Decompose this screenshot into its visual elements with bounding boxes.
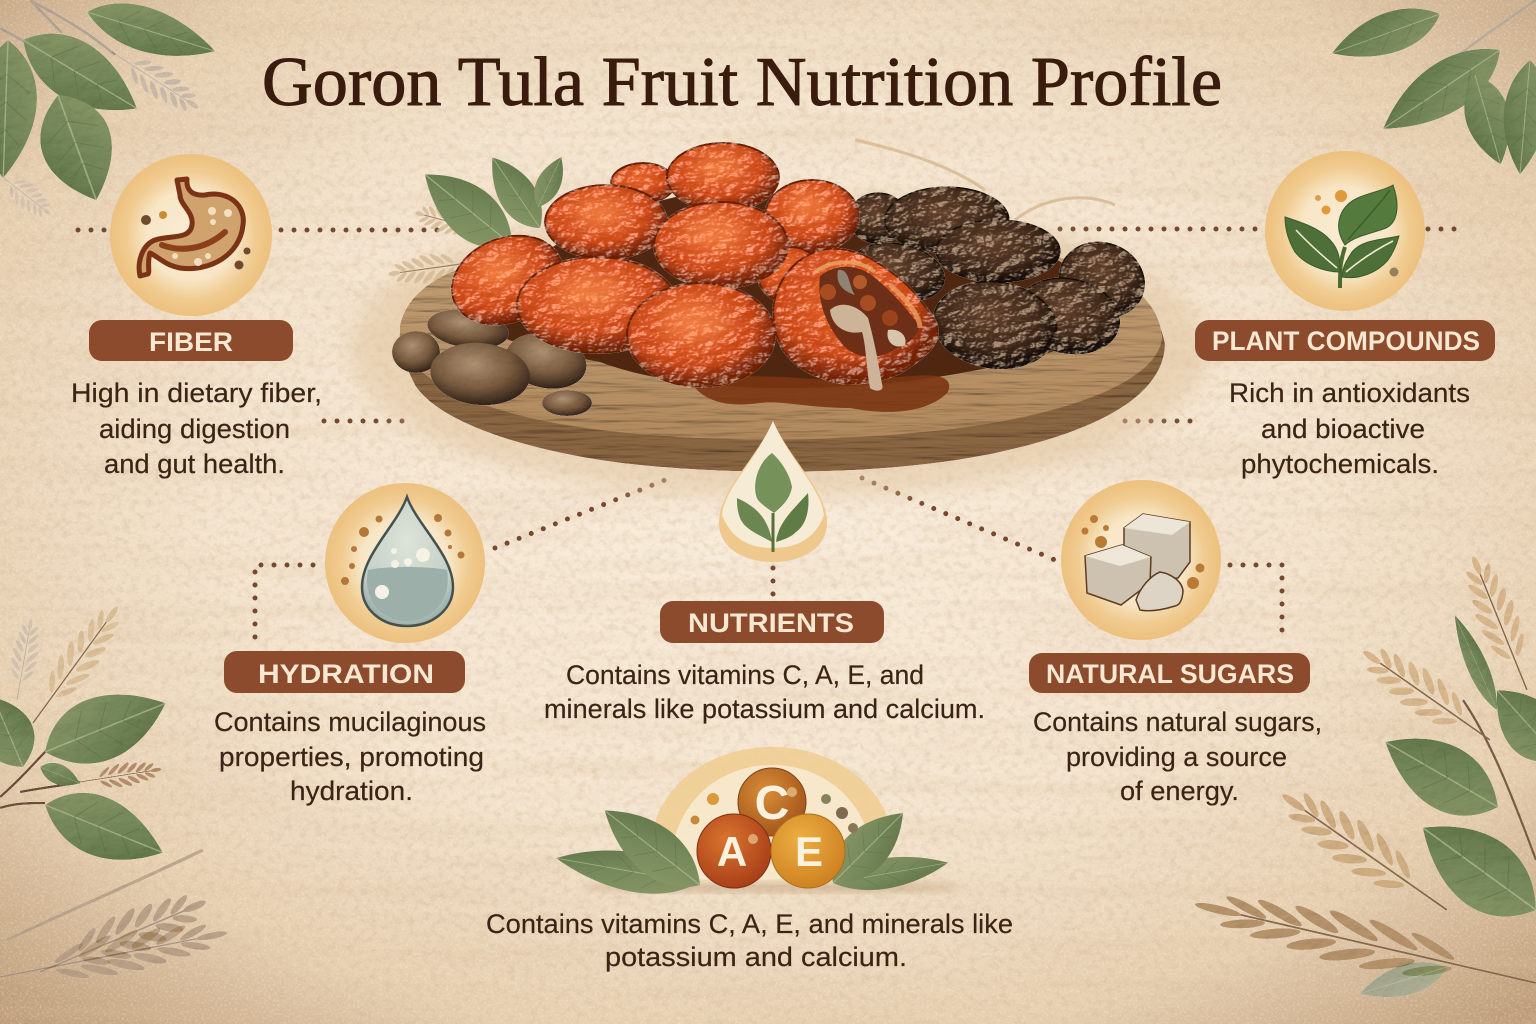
plant compounds description: phytochemicals.: [1241, 449, 1439, 479]
plant compounds description: and bioactive: [1261, 414, 1425, 444]
icon: leaves: [1265, 151, 1425, 311]
icon: stomach: [110, 154, 272, 316]
pill label: nutrients: NUTRIENTS: [688, 608, 854, 638]
vitamin C ball: [738, 768, 806, 836]
hydration description: [214, 707, 486, 806]
pill label: natural sugars: [1029, 653, 1310, 693]
plant compounds panel: [1195, 151, 1495, 479]
pill label: nutrients: [660, 601, 884, 643]
opened fruit interior: [815, 262, 920, 391]
natural sugars description: providing a source: [1066, 742, 1287, 772]
foliage: top right: [1325, 0, 1536, 177]
foliage: top left: [0, 0, 222, 226]
plant compounds description: Rich in antioxidants: [1229, 378, 1470, 408]
decorative dots: [690, 793, 858, 833]
icon: sugar cubes: [1061, 480, 1221, 640]
title: Goron Tula Fruit Nutrition Profile: [262, 44, 1222, 121]
nutrients description: [544, 660, 985, 724]
leaves: [553, 792, 951, 905]
pill label: plant compounds: PLANT COMPOUNDS: [1212, 326, 1480, 356]
dotted connector lines: [78, 229, 1465, 638]
glossy highlights on fruit: [476, 153, 830, 342]
pill label: natural sugars: NATURAL SUGARS: [1046, 659, 1294, 689]
vitamin C ball: C: [755, 777, 789, 830]
brown nuts: [392, 304, 592, 416]
natural sugars description: [1033, 707, 1322, 806]
nutrients description: minerals like potassium and calcium.: [544, 694, 985, 724]
small leaves behind fruit: [409, 147, 572, 265]
vitamin A ball: A: [717, 828, 747, 875]
pill label: fiber: [89, 320, 293, 361]
icon: water drop: [325, 483, 485, 643]
natural sugars description: of energy.: [1120, 776, 1239, 806]
hydration description: properties, promoting: [219, 742, 484, 772]
pill label: hydration: HYDRATION: [258, 659, 434, 689]
central fruit plate illustration: [350, 140, 1210, 500]
foliage: bottom left: [0, 594, 232, 1000]
icon: leaf in droplet: [719, 421, 827, 562]
paper wash behind the plate: [350, 200, 1210, 500]
natural sugars description: Contains natural sugars,: [1033, 707, 1322, 737]
orange dried fruits: [438, 143, 938, 387]
fiber description: and gut health.: [104, 449, 285, 479]
sunburst dome: [652, 747, 892, 885]
syrup spill: [690, 375, 949, 412]
dark dried fruits: [846, 187, 1155, 376]
nutrients description: Contains vitamins C, A, E, and: [566, 660, 924, 690]
pill label: plant compounds: [1195, 320, 1495, 361]
inner dome highlight: [672, 765, 872, 885]
bottom vitamins and minerals text: Contains vitamins C, A, E, and minerals like: [486, 909, 1013, 939]
plant compounds description: [1229, 378, 1470, 479]
vitamin A ball: [697, 814, 771, 888]
fiber panel: [71, 154, 322, 479]
hydration panel: [214, 483, 486, 806]
bottom vitamins and minerals text: [486, 909, 1013, 972]
hydration description: Contains mucilaginous: [214, 707, 486, 737]
nutrients panel: [544, 421, 985, 724]
pill label: fiber: FIBER: [149, 327, 233, 357]
vitamins illustration: [553, 747, 960, 905]
fiber description: [71, 378, 322, 479]
wooden plate: [400, 250, 1165, 472]
fiber description: aiding digestion: [99, 414, 290, 444]
hydration description: hydration.: [290, 776, 413, 806]
bottom vitamins and minerals text: potassium and calcium.: [605, 942, 907, 972]
vitamin E ball: E: [795, 828, 823, 875]
pill label: hydration: [224, 651, 465, 693]
vitamin E ball: [771, 814, 845, 888]
fiber description: High in dietary fiber,: [71, 378, 322, 408]
shadow underlay beneath fruit pile: [480, 190, 1102, 388]
ground shadow: [580, 881, 960, 893]
foliage: bottom right: [1188, 548, 1536, 1011]
natural sugars panel: [1029, 480, 1322, 806]
faint ornaments behind plate: [386, 140, 1115, 290]
